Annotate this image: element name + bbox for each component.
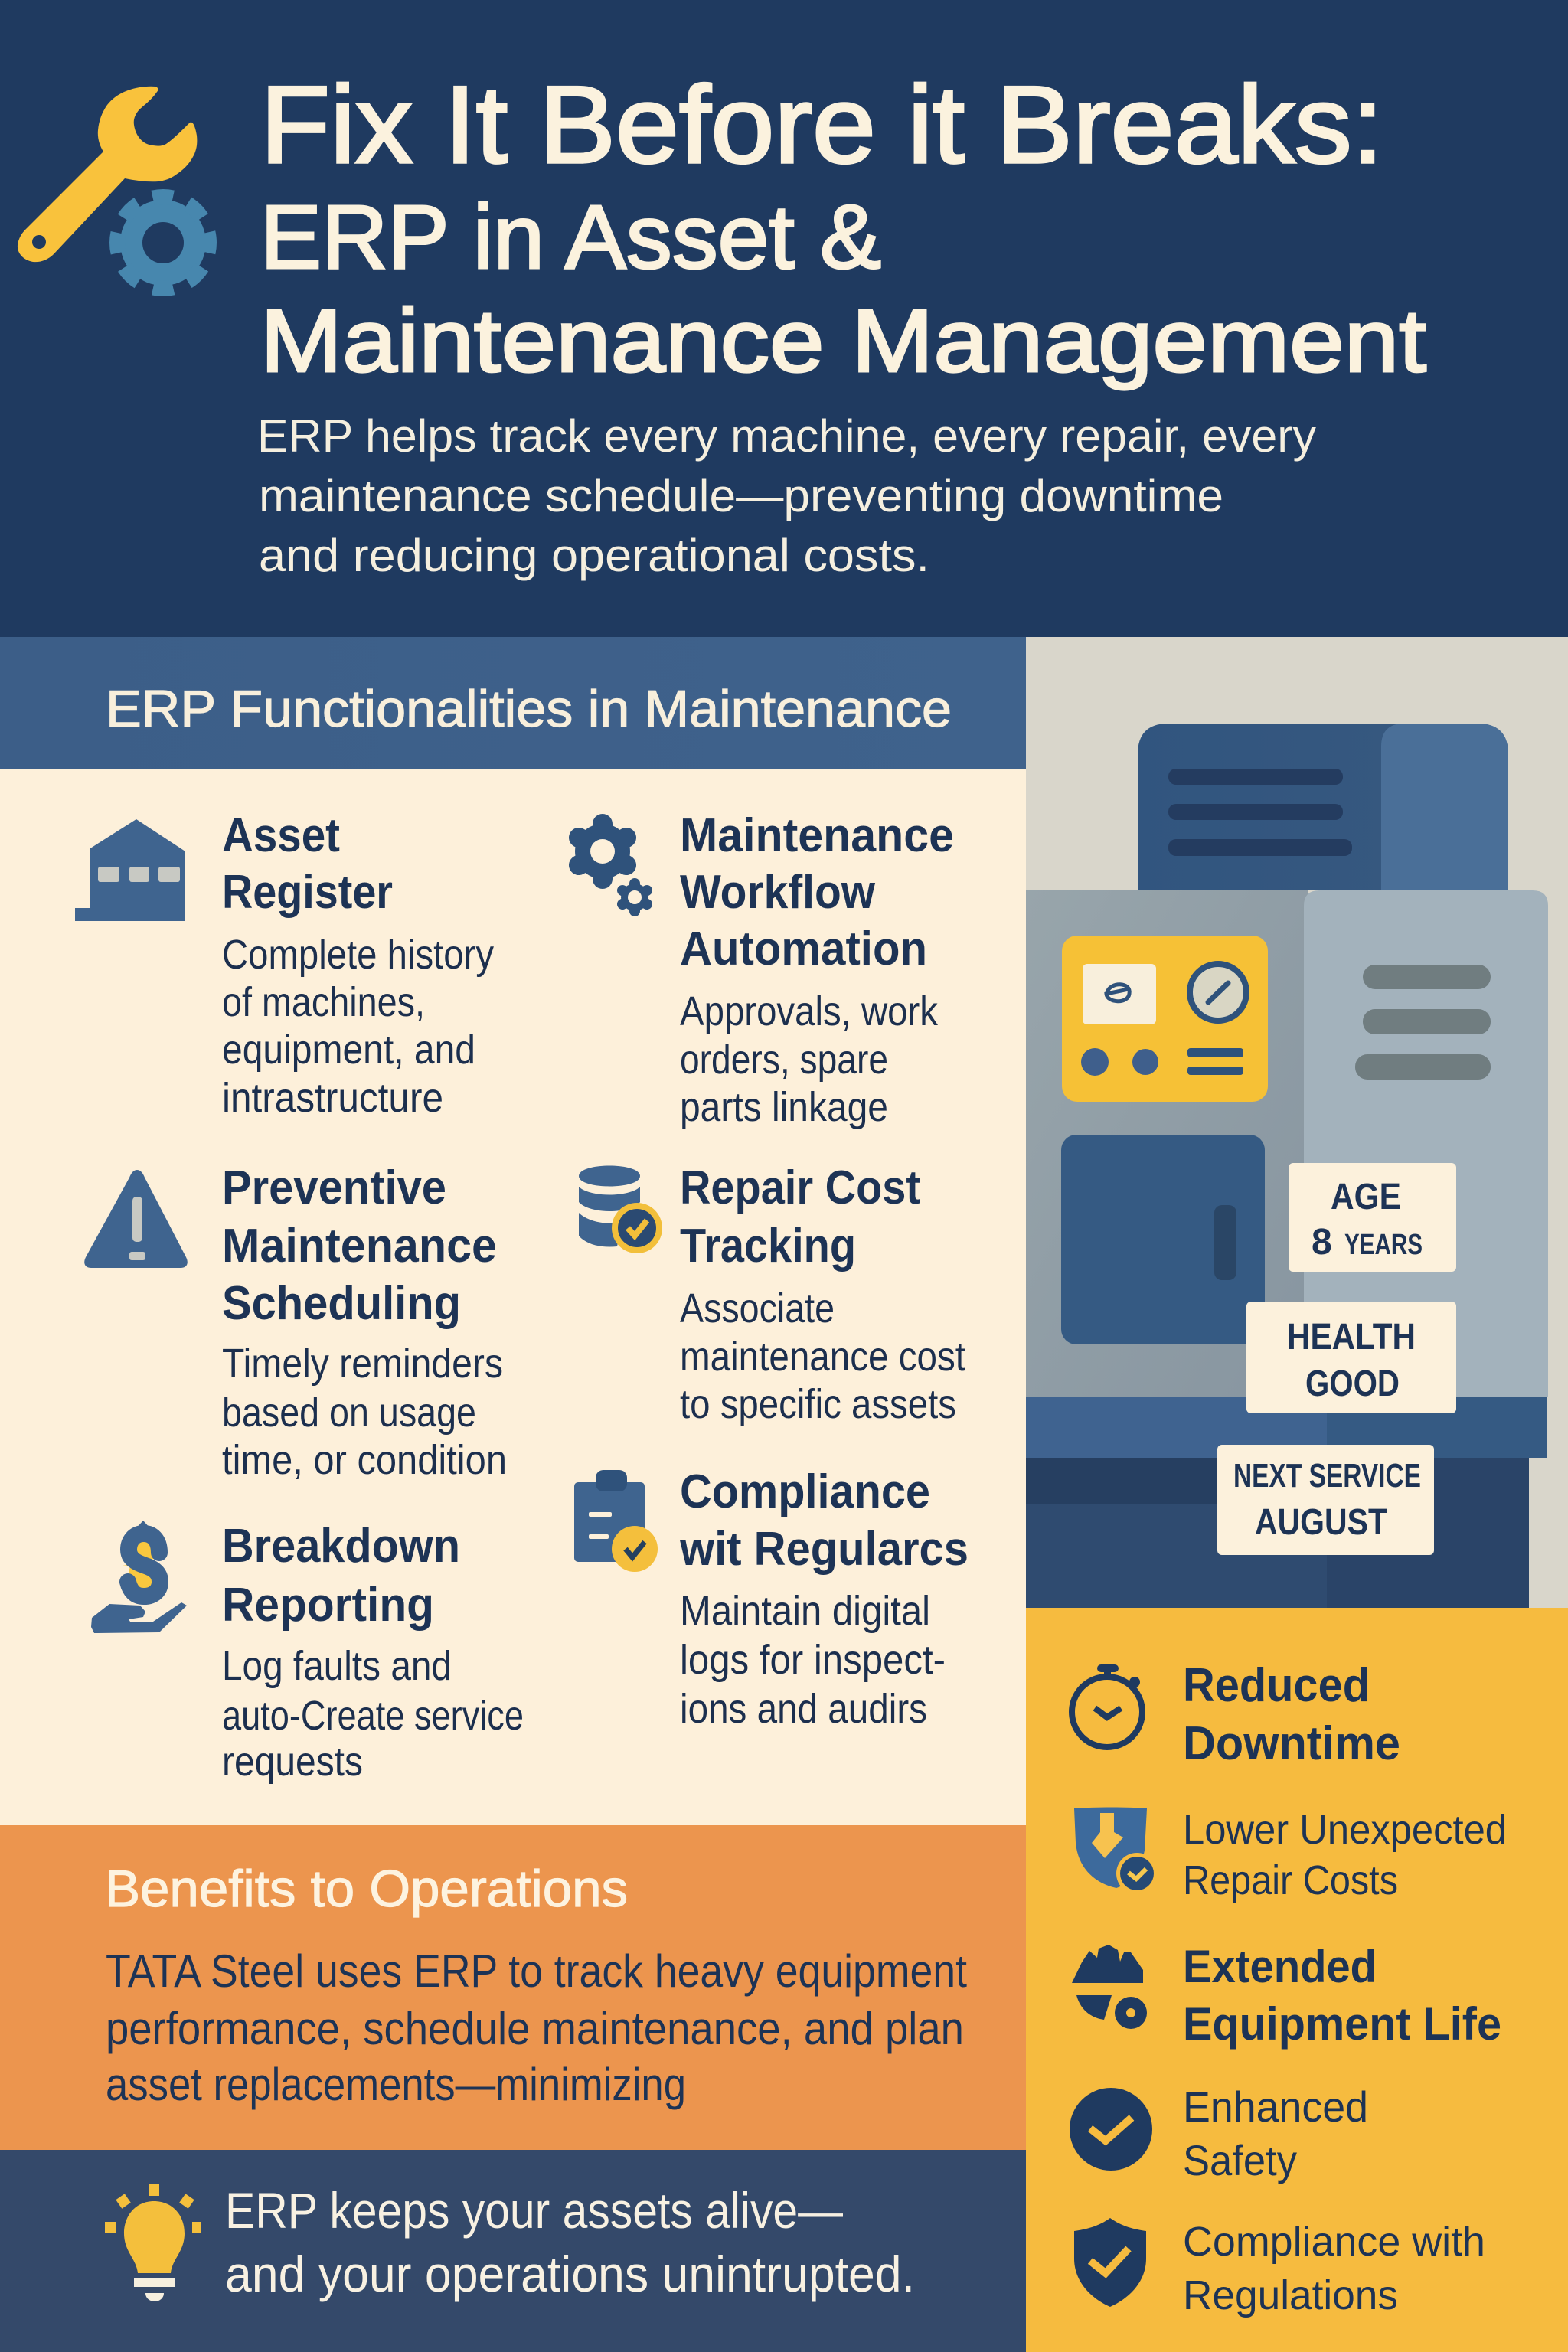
item: Asset Register: of machines,: [222, 979, 425, 1025]
case study text: TATA Steel uses ERP to track heavy equipment: [106, 1945, 967, 1997]
icon: database with check: [579, 1165, 662, 1253]
icon: shield check: [1074, 2218, 1146, 2307]
item: Preventive Maintenance Scheduling: [84, 1161, 507, 1483]
item: Repair Cost Tracking: Tracking: [680, 1220, 856, 1272]
item: Repair Cost Tracking: Repair Cost: [680, 1161, 920, 1214]
panel: ERP functionalities: [0, 637, 1026, 1825]
header panel: [0, 0, 1568, 637]
title: Maintenance Management: [260, 291, 1426, 390]
item: Repair Cost Tracking: to specific assets: [680, 1381, 956, 1427]
item: Asset Register: Register: [222, 866, 393, 919]
heading: ERP Functionalities in Maintenance: ERP Functionalities in Maintenance: [106, 680, 952, 738]
item: reduced downtime: [1072, 1659, 1400, 1770]
panel: benefits to operations: [0, 1825, 1026, 2150]
panel: closing message: [0, 2150, 1026, 2352]
item: Breakdown Reporting: auto-Create service: [222, 1693, 524, 1739]
title: [260, 64, 1426, 390]
item: Compliance with Regulations: logs for inspect-: [680, 1637, 946, 1683]
icon: hard hat and part: [1072, 1945, 1147, 2029]
tag: next service: [1217, 1445, 1434, 1555]
intro text: maintenance schedule—preventing downtime: [259, 470, 1223, 521]
intro text: and reducing operational costs.: [259, 530, 929, 581]
item: enhanced safety: Enhanced: [1183, 2082, 1368, 2131]
machine body: [1026, 890, 1548, 1396]
item: Preventive Maintenance Scheduling: Scheduling: [222, 1277, 461, 1330]
tag: age: 8: [1312, 1222, 1332, 1263]
item: lower unexpected repair costs: [1074, 1807, 1507, 1903]
title: ERP in Asset &: [260, 187, 881, 288]
tag: next service: AUGUST: [1255, 1502, 1387, 1543]
item: Preventive Maintenance Scheduling: based on usage: [222, 1390, 476, 1436]
machine base: [1026, 1396, 1547, 1609]
tag: health: GOOD: [1305, 1364, 1400, 1404]
item: Asset Register: equipment, and: [222, 1027, 475, 1073]
panel: benefits list: [1026, 1608, 1568, 2352]
tag: age: YEARS: [1344, 1229, 1423, 1261]
item: compliance with regulations: Compliance with: [1183, 2219, 1485, 2265]
icon: shield with down arrow: [1074, 1807, 1158, 1894]
item: extended equipment life: Extended: [1183, 1941, 1377, 1992]
icon: light bulb: [105, 2184, 201, 2301]
item: Preventive Maintenance Scheduling: Preventive: [222, 1161, 446, 1214]
closing text: and your operations unintrupted.: [225, 2246, 915, 2302]
icon: factory building: [75, 819, 185, 921]
item: Breakdown Reporting: Breakdown: [222, 1520, 460, 1573]
tag: age: [1289, 1163, 1456, 1272]
item: Compliance with Regulations: [574, 1465, 969, 1732]
item: enhanced safety: [1070, 2082, 1368, 2184]
item: reduced downtime: Reduced: [1183, 1659, 1370, 1712]
item: lower unexpected repair costs: Repair Costs: [1183, 1857, 1398, 1903]
item: enhanced safety: Safety: [1183, 2136, 1297, 2184]
item: Maintenance Workflow Automation: orders, spare: [680, 1037, 888, 1083]
item: lower unexpected repair costs: Lower Unexpected: [1183, 1807, 1507, 1853]
item: reduced downtime: Downtime: [1183, 1717, 1400, 1770]
case study text: asset replacements—minimizing: [106, 2059, 686, 2110]
icon: stopwatch: [1072, 1664, 1142, 1747]
control panel: [1062, 936, 1268, 1102]
item: Maintenance Workflow Automation: Maintenance: [680, 809, 954, 862]
item: Compliance with Regulations: wit Regularcs: [679, 1523, 969, 1576]
icon: gears: [575, 824, 648, 911]
item: Breakdown Reporting: [91, 1520, 524, 1785]
icon: warning triangle: [84, 1170, 188, 1268]
item: Maintenance Workflow Automation: Approvals, work: [680, 988, 939, 1034]
item: Repair Cost Tracking: Associate: [680, 1285, 835, 1331]
item: extended equipment life: Equipment Life: [1183, 1998, 1501, 2050]
case study text: [106, 1945, 967, 2110]
item: compliance with regulations: Regulations: [1183, 2272, 1398, 2318]
item: Compliance with Regulations: Compliance: [680, 1465, 930, 1518]
item: Asset Register: Asset: [222, 809, 340, 862]
item: Breakdown Reporting: Log faults and: [222, 1643, 452, 1689]
item: Maintenance Workflow Automation: parts linkage: [680, 1084, 888, 1130]
intro text: ERP helps track every machine, every repair, every: [257, 410, 1316, 462]
title: Fix It Before it Breaks:: [260, 64, 1383, 186]
icon: dollar in hand: [91, 1521, 187, 1633]
item: Maintenance Workflow Automation: Workflow: [680, 866, 876, 919]
tag: health: HEALTH: [1287, 1317, 1416, 1357]
icon: gear: [117, 197, 209, 289]
item: Repair Cost Tracking: maintenance cost: [680, 1334, 965, 1380]
item: Maintenance Workflow Automation: [575, 809, 954, 1130]
item: Repair Cost Tracking: [579, 1161, 965, 1427]
item: Breakdown Reporting: requests: [222, 1739, 363, 1785]
item: Asset Register: intrastructure: [222, 1075, 443, 1121]
intro text: [257, 410, 1316, 581]
cabinet door: [1061, 1135, 1265, 1344]
item: Compliance with Regulations: Maintain digital: [680, 1588, 930, 1634]
item: compliance with regulations: [1074, 2218, 1485, 2318]
tag: health: [1246, 1302, 1456, 1413]
item: Preventive Maintenance Scheduling: time, or condition: [222, 1437, 507, 1483]
icon: clipboard with check: [574, 1470, 658, 1572]
machine top unit: [1138, 724, 1508, 890]
closing text: ERP keeps your assets alive—: [225, 2182, 843, 2239]
item: extended equipment life: [1072, 1941, 1501, 2050]
tag: age: AGE: [1331, 1177, 1401, 1217]
item: Compliance with Regulations: ions and audirs: [680, 1686, 927, 1732]
panel: machine illustration: [1026, 637, 1568, 1609]
item: Asset Register: Complete history: [222, 932, 494, 978]
item: Preventive Maintenance Scheduling: Maintenance: [222, 1220, 497, 1272]
item: Breakdown Reporting: Reporting: [222, 1579, 434, 1632]
closing text: [225, 2182, 915, 2302]
case study text: performance, schedule maintenance, and plan: [106, 2003, 964, 2054]
tag: next service: NEXT SERVICE: [1233, 1457, 1421, 1494]
item: Maintenance Workflow Automation: Automation: [680, 923, 927, 975]
item: Asset Register: [75, 809, 494, 1121]
heading: Benefits to Operations: Benefits to Operations: [105, 1860, 628, 1918]
item: Preventive Maintenance Scheduling: Timely reminders: [222, 1341, 503, 1387]
icon: wrench: [18, 87, 197, 262]
icon: check circle: [1070, 2088, 1152, 2171]
